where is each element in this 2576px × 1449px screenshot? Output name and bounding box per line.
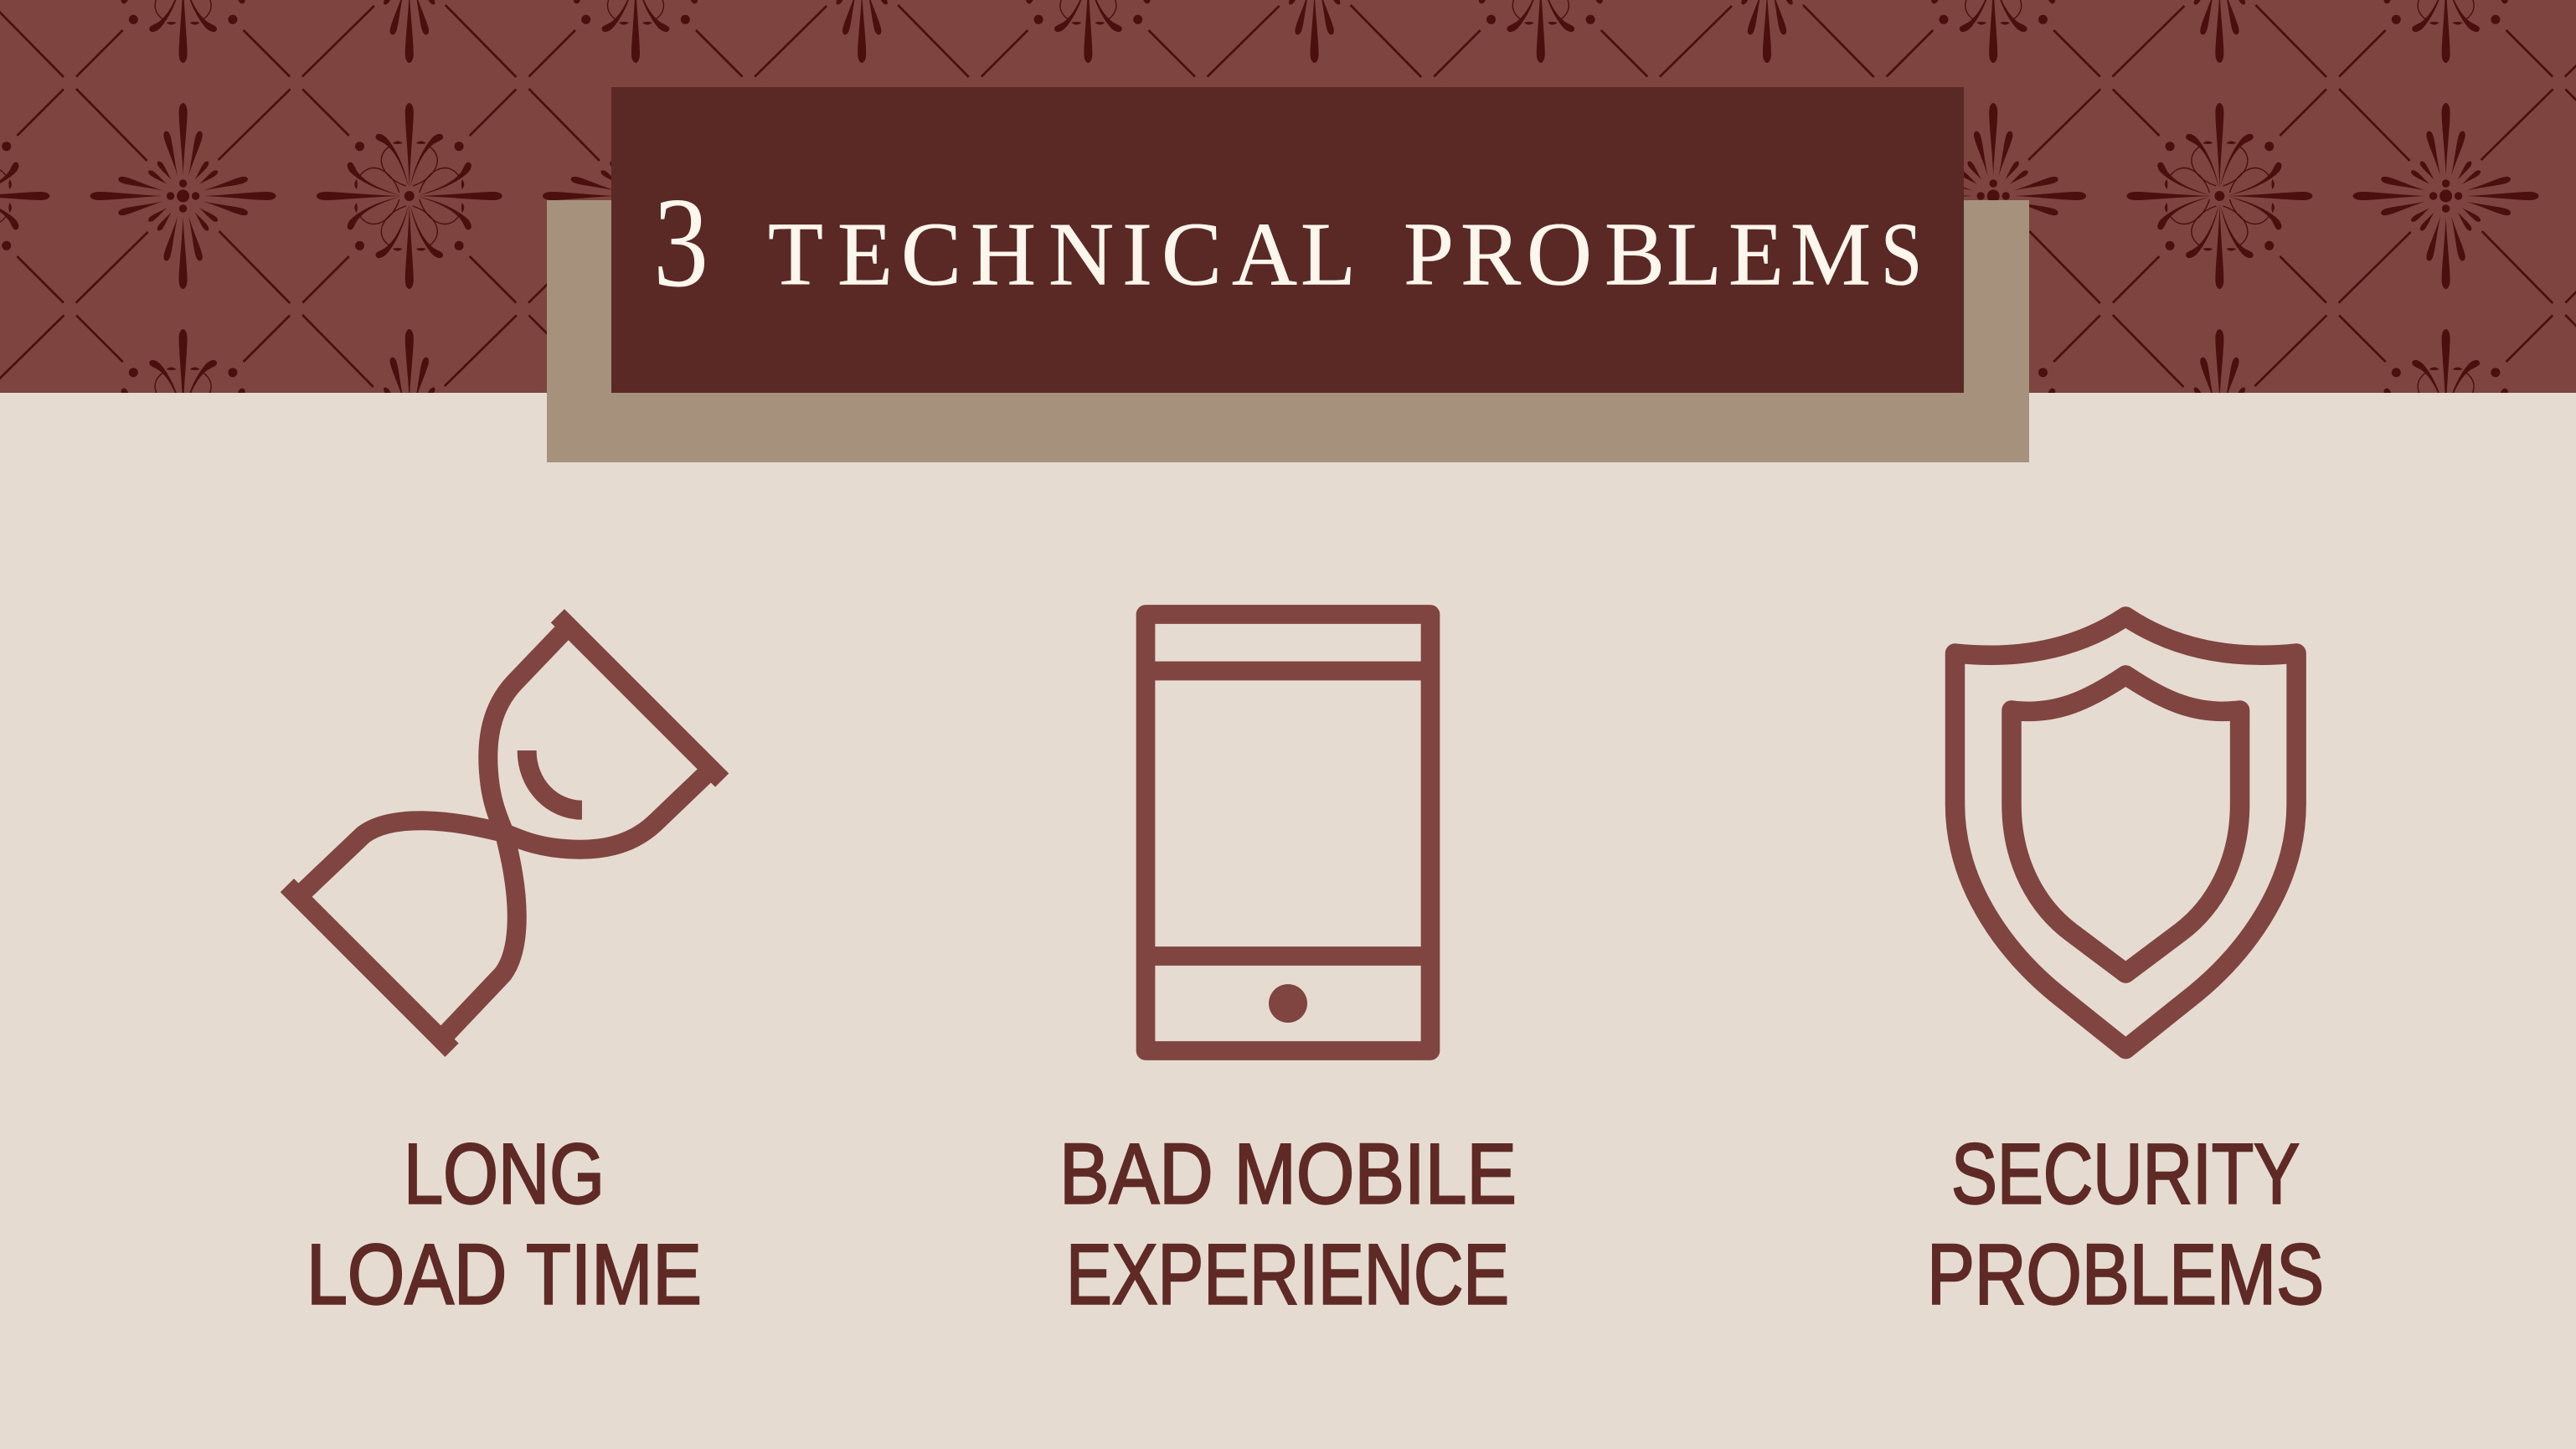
title panel (611, 87, 1964, 393)
label: bad mobile experience: EXPERIENCE (1066, 1227, 1509, 1323)
icon: shield (1955, 616, 2296, 1049)
title shadow block (547, 200, 2029, 462)
title: S (1881, 204, 1922, 305)
icon: hourglass (287, 616, 722, 1050)
label: security problems: PROBLEMS (1927, 1227, 2324, 1323)
label: long load time (307, 1127, 702, 1323)
label: long load time: LOAD TIME (307, 1227, 702, 1323)
patterned header band (0, 0, 2576, 393)
label: bad mobile experience (1059, 1127, 1517, 1323)
label: long load time: LONG (404, 1127, 605, 1222)
label: security problems: SECURITY (1951, 1127, 2300, 1222)
icon: mobile phone (1146, 615, 1430, 1050)
label: bad mobile experience: BAD MOBILE (1059, 1127, 1517, 1222)
title (653, 172, 1922, 314)
title words: TECHNICAL (768, 204, 1356, 305)
title number: 3 (653, 172, 708, 314)
label: security problems (1927, 1127, 2324, 1323)
title: PROBLEM (1404, 204, 1871, 305)
